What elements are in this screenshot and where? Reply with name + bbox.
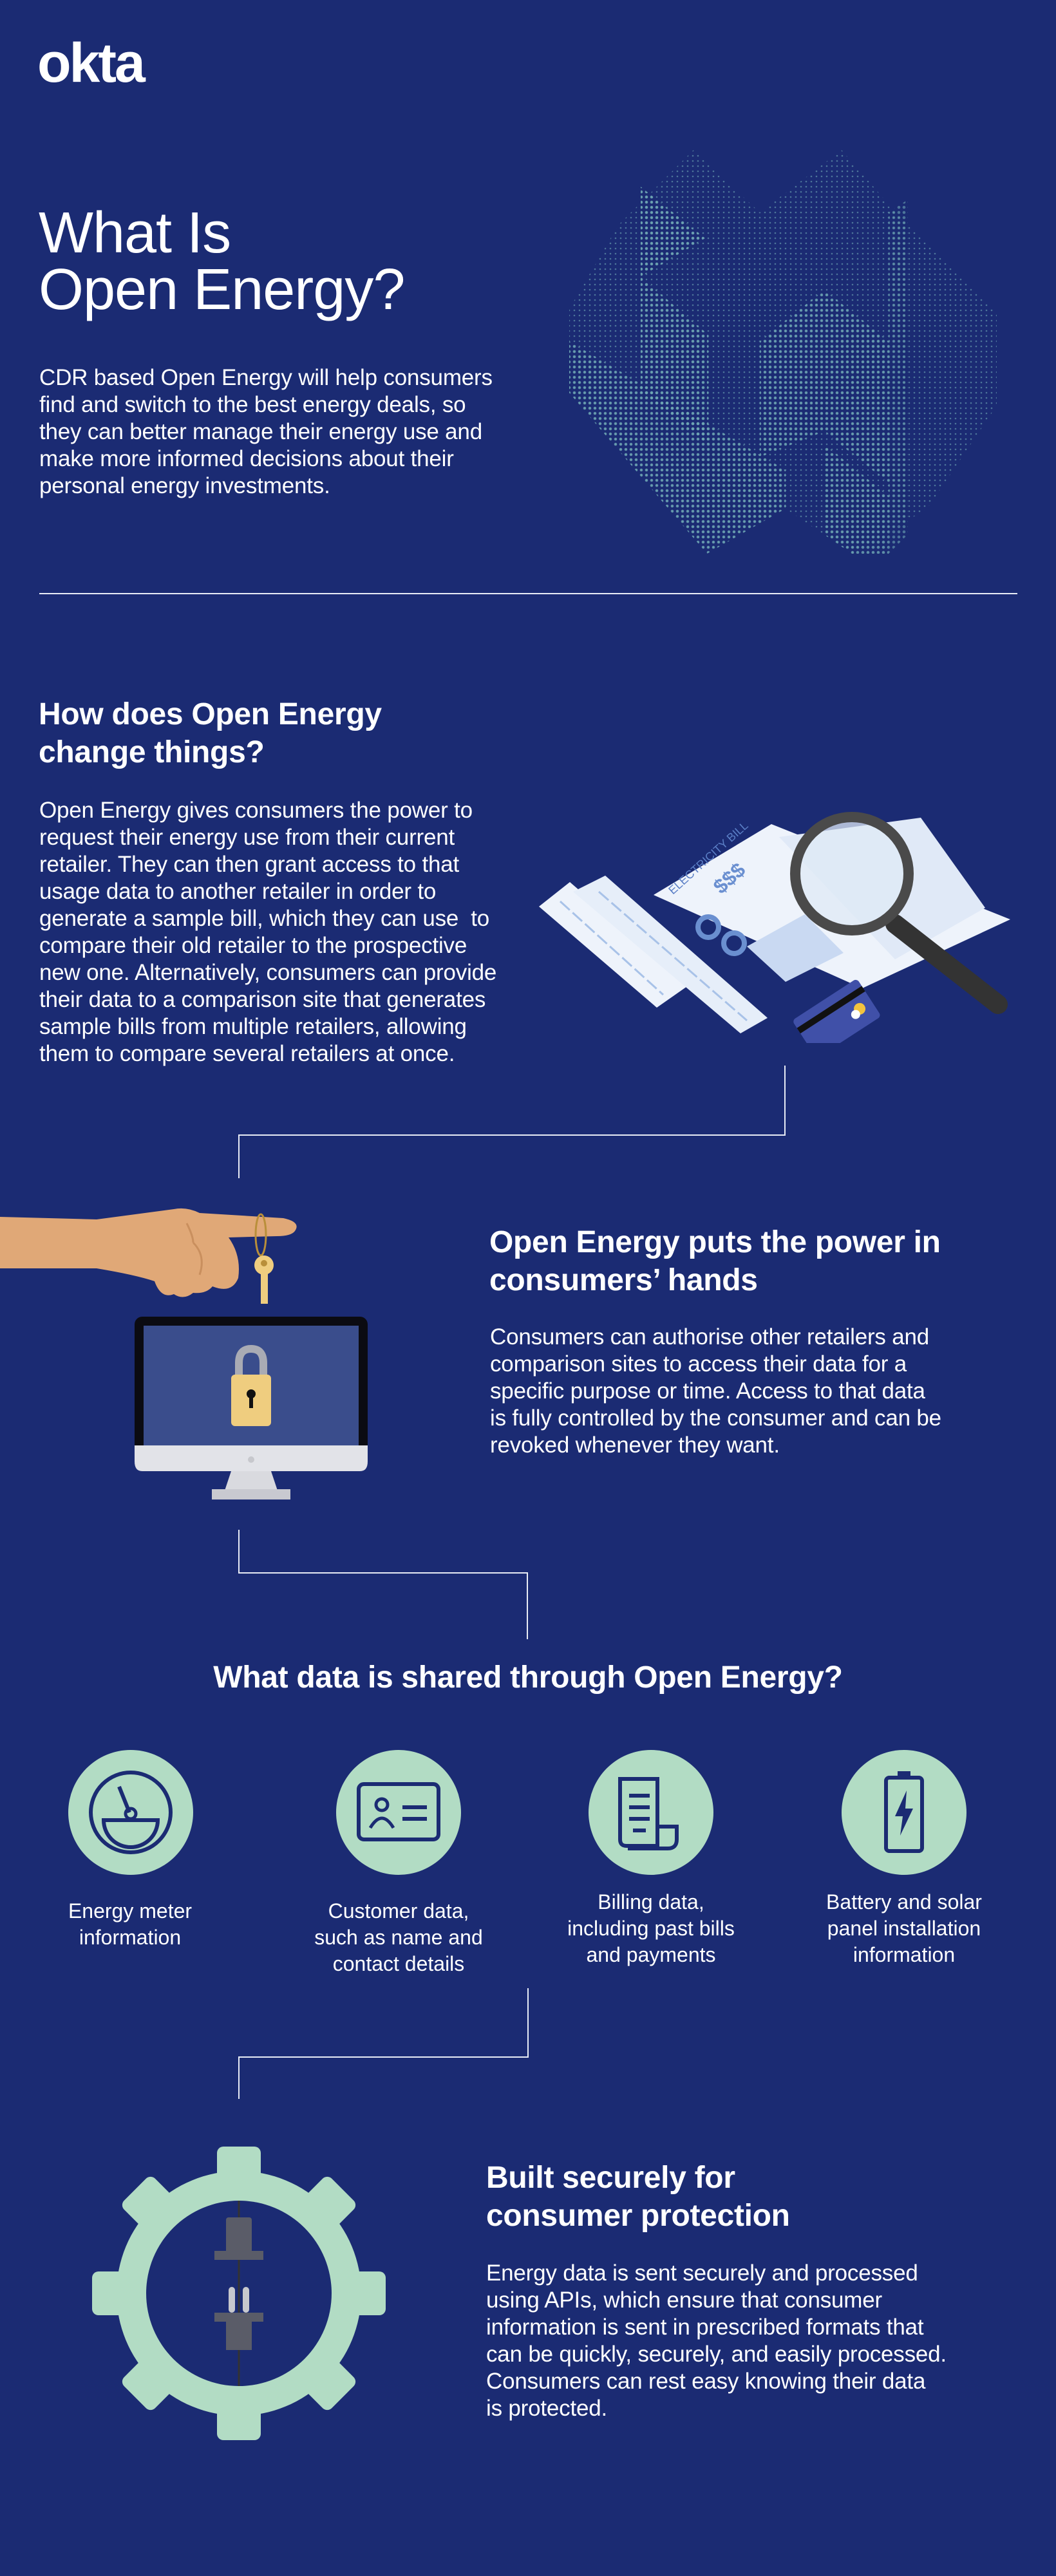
illustration: bills with magnifying glass: $$$ [709, 858, 750, 898]
intro text: make more informed decisions about their [39, 446, 454, 471]
heading: built securely: consumer protection [486, 2199, 790, 2233]
text: how does open energy change things: them to compare several retailers at once. [39, 1041, 455, 1066]
label: energy meter: information [79, 1926, 181, 1949]
text: built securely [486, 2261, 947, 2421]
label: billing data: Billing data, [598, 1890, 704, 1913]
label: battery: Battery and solar [826, 1890, 982, 1913]
text: how does open energy change things: their data to a comparison site that generates [39, 987, 486, 1012]
text: built securely: Consumers can rest easy knowing their data [486, 2369, 925, 2394]
illustration: bills with magnifying glass: ELECTRICITY BILL [666, 819, 751, 897]
heading: built securely: Built securely for [486, 2161, 735, 2195]
title: What Is [39, 201, 231, 265]
text: how does open energy change things: request their energy use from their current [39, 825, 455, 850]
label: battery: information [853, 1943, 955, 1966]
icon: customer data [336, 1750, 461, 1875]
label: customer data: Customer data, [328, 1899, 469, 1923]
receipt strips [539, 882, 689, 1008]
icon: billing data [589, 1750, 713, 1875]
text: power in consumers' hands: revoked whenever they want. [490, 1433, 780, 1458]
label: customer data: such as name and [314, 1926, 483, 1949]
magnifying glass [895, 924, 998, 1004]
label: battery: panel installation [827, 1917, 981, 1940]
text: how does open energy change things: new one. Alternatively, consumers can provide [39, 960, 496, 985]
label: billing data [567, 1890, 735, 1966]
icon: energy meter [68, 1750, 193, 1875]
text: power in consumers' hands: Consumers can authorise other retailers and [490, 1324, 929, 1349]
intro text: they can better manage their energy use and [39, 419, 482, 444]
text: built securely: can be quickly, securely, and easily processed. [486, 2342, 947, 2367]
heading: built securely [486, 2161, 790, 2233]
text: built securely: information is sent in prescribed formats that [486, 2315, 923, 2340]
divider [39, 593, 1017, 594]
text: how does open energy change things: compare their old retailer to the prospective [39, 933, 467, 958]
label: energy meter [68, 1899, 192, 1949]
icon: battery [842, 1750, 966, 1875]
intro text: personal energy investments. [39, 473, 330, 498]
title [39, 201, 404, 322]
text: power in consumers' hands: is fully controlled by the consumer and can be [490, 1406, 941, 1431]
heading: how does open energy change things: How does Open Energy [39, 697, 382, 731]
label: customer data [314, 1899, 483, 1975]
heading: power in consumers' hands [489, 1225, 941, 1297]
label: billing data: including past bills [567, 1917, 735, 1940]
label: battery [826, 1890, 982, 1966]
text: power in consumers' hands: specific purpose or time. Access to that data [490, 1378, 925, 1404]
text: built securely: using APIs, which ensure that consumer [486, 2288, 882, 2313]
credit card [792, 979, 882, 1058]
main bill [654, 824, 1010, 988]
heading: power in consumers' hands: Open Energy puts the power in [489, 1225, 941, 1259]
decorative dot graphic [569, 150, 997, 554]
intro text: CDR based Open Energy will help consumers [39, 365, 493, 390]
heading: what data is shared: What data is shared through Open Energy? [213, 1660, 843, 1695]
text: how does open energy change things [39, 798, 496, 1066]
heading: how does open energy change things [39, 697, 382, 769]
text: how does open energy change things: sample bills from multiple retailers, allowing [39, 1014, 467, 1039]
text: power in consumers' hands [490, 1324, 941, 1458]
illustration: bills with magnifying glass [539, 812, 1010, 1043]
heading: how does open energy change things: change things? [39, 735, 264, 769]
title: Open Energy? [39, 258, 404, 322]
connector 1 [784, 1066, 786, 1136]
label: energy meter: Energy meter [68, 1899, 192, 1923]
logo: okta: okta [37, 32, 144, 94]
illustration: hand holding key [0, 1208, 297, 1304]
connector 2 [238, 1530, 240, 1574]
intro text [39, 365, 493, 498]
label: billing data: and payments [586, 1943, 716, 1966]
text: how does open energy change things: generate a sample bill, which they can use to [39, 906, 489, 931]
text: how does open energy change things: Open Energy gives consumers the power to [39, 798, 473, 823]
text: how does open energy change things: usage data to another retailer in order to [39, 879, 436, 904]
intro text: find and switch to the best energy deals, so [39, 392, 466, 417]
illustration: gear with plug [92, 2147, 386, 2440]
text: power in consumers' hands: comparison sites to access their data for a [490, 1351, 907, 1377]
connector 3 [527, 1988, 529, 2058]
text: built securely: Energy data is sent securely and processed [486, 2261, 918, 2286]
illustration: monitor with lock [135, 1317, 368, 1500]
label: customer data: contact details [333, 1952, 464, 1975]
text: how does open energy change things: retailer. They can then grant access to that [39, 852, 459, 877]
heading: power in consumers' hands: consumers’ hands [489, 1263, 758, 1297]
text: built securely: is protected. [486, 2396, 607, 2421]
